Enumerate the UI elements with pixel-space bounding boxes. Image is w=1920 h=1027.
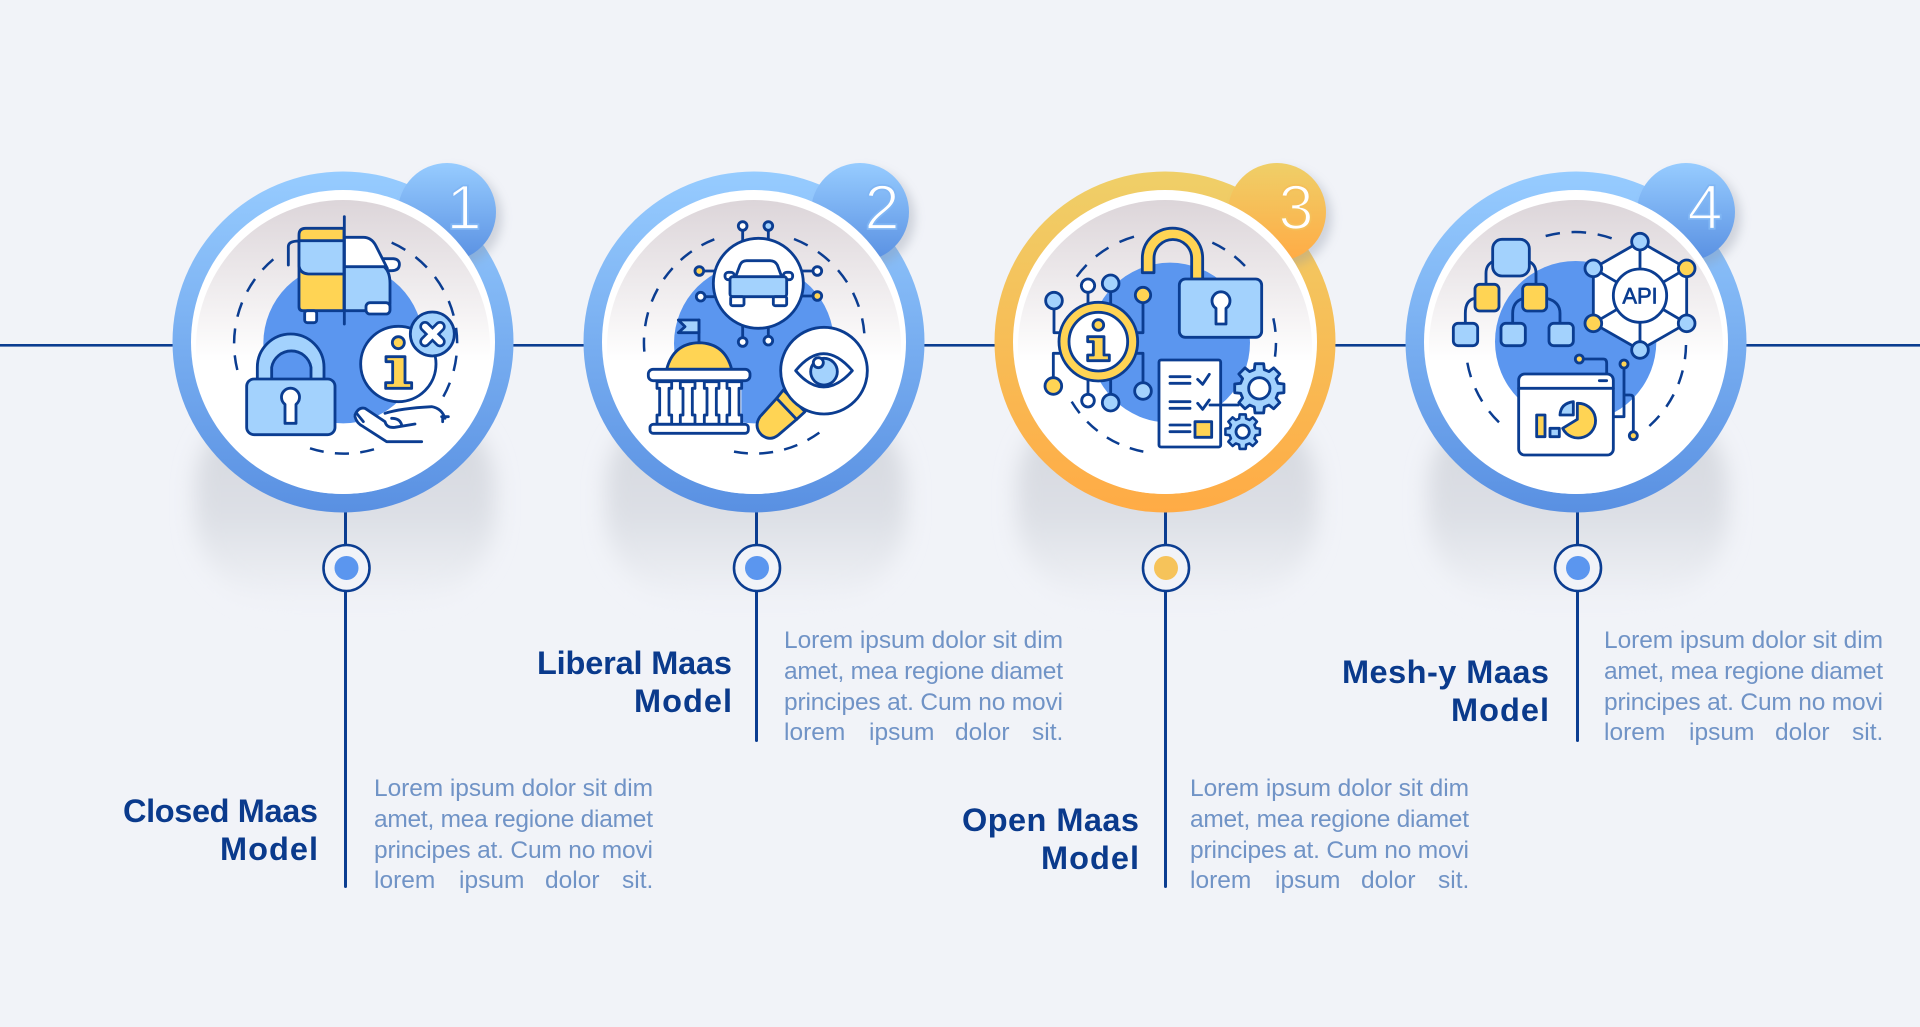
number badge 3 — [1228, 163, 1332, 267]
heading: Mesh-y Maas Model: Model — [1451, 692, 1549, 728]
text block 2 — [784, 627, 1063, 746]
text block 3: dolor — [1361, 867, 1415, 894]
heading: Mesh-y Maas Model: Mesh-y Maas — [1342, 654, 1549, 690]
heading: Closed Maas Model: Model — [220, 831, 318, 867]
marker dot 4 — [1555, 545, 1601, 591]
heading: Closed Maas Model: Closed Maas — [123, 793, 318, 829]
inner white disc 4 — [1424, 190, 1728, 494]
text block 1: Lorem ipsum dolor sit dim — [374, 775, 653, 802]
text block 3: lorem — [1190, 867, 1251, 894]
text block 1: lorem — [374, 867, 435, 894]
text block 1: principes at. Cum no movi — [374, 837, 653, 864]
marker dot 1 — [324, 545, 370, 591]
text block 3: principes at. Cum no movi — [1190, 837, 1469, 864]
text block 3: Lorem ipsum dolor sit dim — [1190, 775, 1469, 802]
heading: Open Maas Model: Model — [1041, 840, 1139, 876]
text block 4 — [1604, 627, 1883, 746]
inner white disc 1 — [191, 190, 495, 494]
text block 4: ipsum — [1689, 719, 1754, 746]
shadow: circle 4 — [1428, 400, 1728, 605]
marker dot 3 — [1143, 545, 1189, 591]
vertical connector 2 — [755, 510, 758, 742]
text block 2: lorem — [784, 719, 845, 746]
number badge 1: 1 — [446, 173, 482, 243]
heading: Open Maas Model — [962, 802, 1139, 876]
number badge 2: 2 — [864, 173, 900, 243]
text block 2: amet, mea regione diamet — [784, 658, 1063, 685]
number badge 2 — [811, 163, 915, 267]
icon: hierarchy, API network, dashboard: API — [1622, 284, 1658, 309]
text block 1 — [374, 775, 653, 894]
vertical connector 1 — [344, 510, 347, 888]
heading: Liberal Maas Model — [537, 645, 732, 719]
icon: hierarchy, API network, dashboard — [1453, 232, 1695, 455]
inner shaded disc 2 — [607, 200, 901, 494]
text block 3: amet, mea regione diamet — [1190, 806, 1469, 833]
panel: circle 1 — [172, 163, 514, 512]
inner shaded disc 3 — [1018, 200, 1312, 494]
vertical connector 3 — [1164, 510, 1167, 888]
text block 3 — [1190, 775, 1469, 894]
text block 2: ipsum — [869, 719, 934, 746]
text block 3: ipsum — [1275, 867, 1340, 894]
icon: connected car, government building, eye magnifier — [644, 222, 867, 454]
text block 4: principes at. Cum no movi — [1604, 689, 1883, 716]
panel: circle 3 — [994, 163, 1336, 512]
number badge 1 — [398, 163, 502, 267]
text block 1: sit. — [622, 867, 653, 894]
text block 2: dolor — [955, 719, 1009, 746]
icon: vehicles, lock, info — [234, 217, 457, 454]
text block 4: sit. — [1852, 719, 1883, 746]
heading: Liberal Maas Model: Liberal Maas — [537, 645, 732, 681]
text block 4: lorem — [1604, 719, 1665, 746]
number badge 4 — [1637, 163, 1741, 267]
text block 2: Lorem ipsum dolor sit dim — [784, 627, 1063, 654]
icon: info circuit, padlock, checklist, gears — [1045, 228, 1284, 452]
panel: circle 4 — [1406, 163, 1746, 512]
panel: circle 2 — [584, 163, 924, 512]
number badge 4: 4 — [1687, 173, 1723, 243]
text block 1: ipsum — [459, 867, 524, 894]
shadow: circle 2 — [606, 400, 906, 605]
inner shaded disc 1 — [196, 200, 490, 494]
heading: Liberal Maas Model: Model — [634, 683, 732, 719]
text block 4: amet, mea regione diamet — [1604, 658, 1883, 685]
text block 4: dolor — [1775, 719, 1829, 746]
marker dot 2 — [734, 545, 780, 591]
text block 2: principes at. Cum no movi — [784, 689, 1063, 716]
heading: Mesh-y Maas Model — [1342, 654, 1549, 728]
inner white disc 3 — [1013, 190, 1317, 494]
shadow: circle 3 — [1017, 400, 1317, 605]
number badge 3: 3 — [1278, 173, 1314, 243]
shadow: circle 1 — [195, 400, 495, 605]
text block 3: sit. — [1438, 867, 1469, 894]
text block 2: sit. — [1032, 719, 1063, 746]
horizontal timeline — [0, 344, 1920, 347]
text block 4: Lorem ipsum dolor sit dim — [1604, 627, 1883, 654]
inner shaded disc 4 — [1429, 200, 1723, 494]
vertical connector 4 — [1576, 510, 1579, 742]
heading: Closed Maas Model — [123, 793, 318, 867]
text block 1: amet, mea regione diamet — [374, 806, 653, 833]
heading: Open Maas Model: Open Maas — [962, 802, 1139, 838]
text block 1: dolor — [545, 867, 599, 894]
inner white disc 2 — [602, 190, 906, 494]
